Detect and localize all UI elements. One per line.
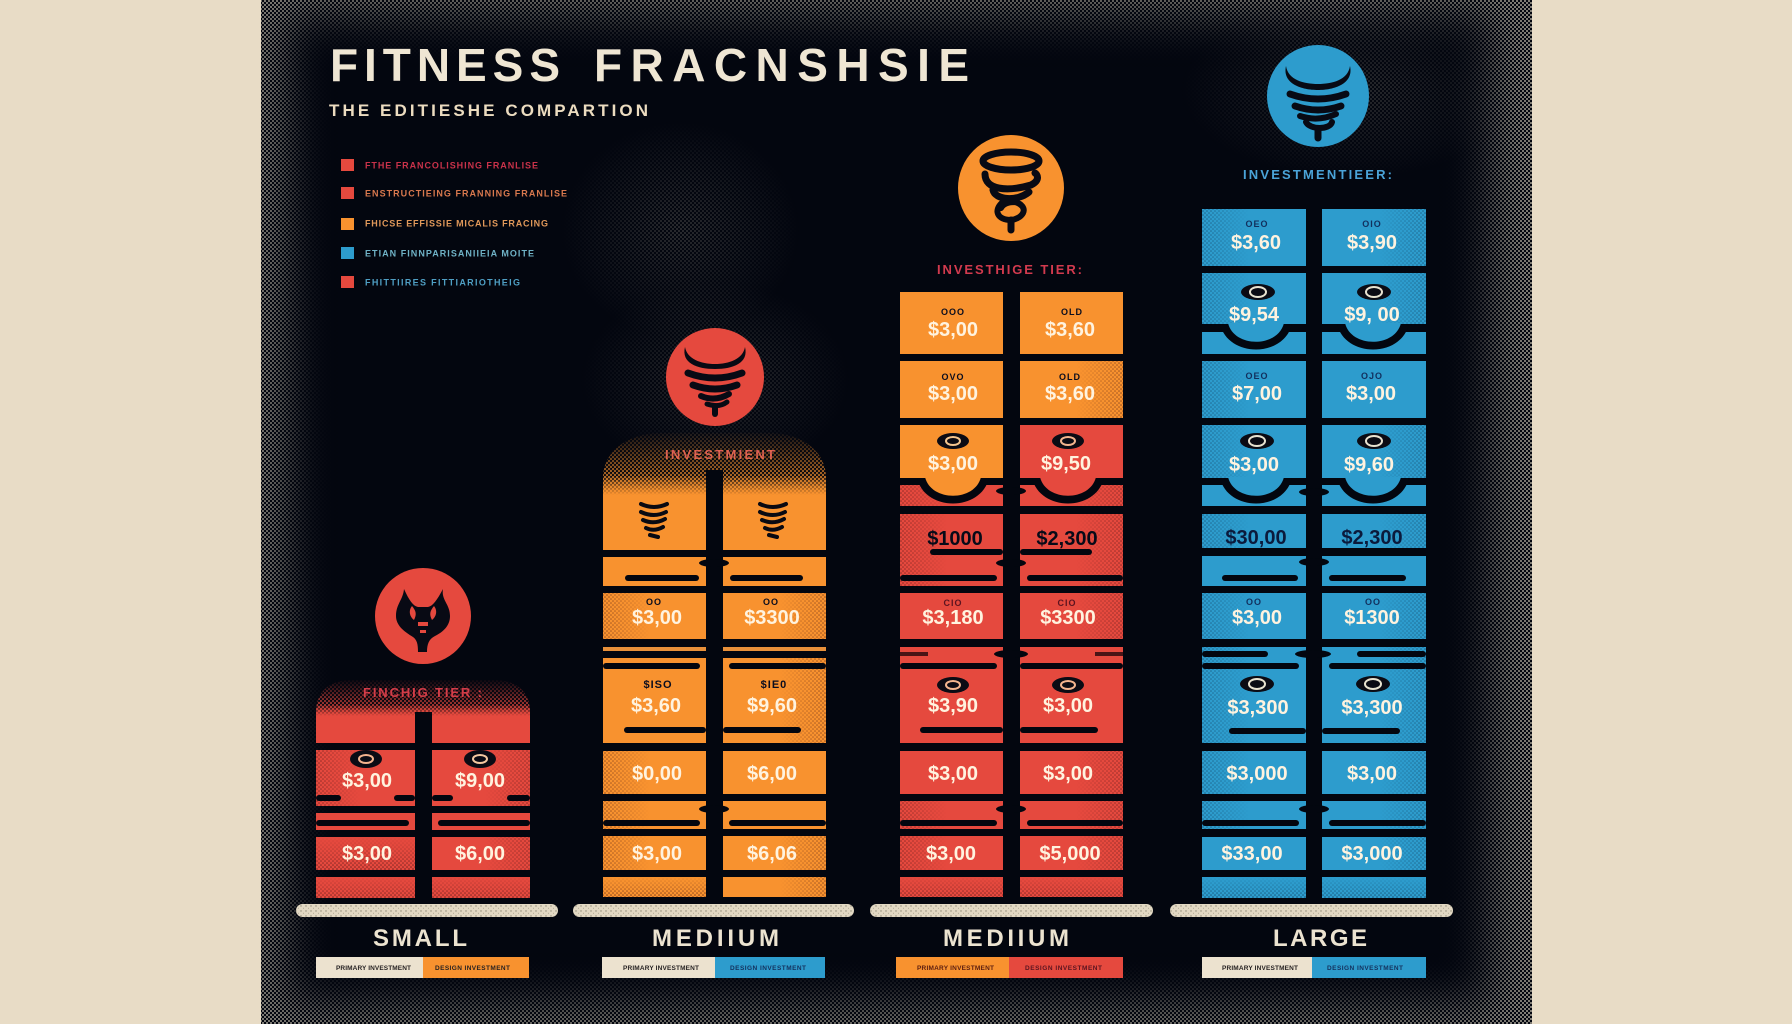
row 5 [900, 593, 1123, 639]
column: medium tier two [870, 135, 1153, 978]
halftone panel edge [261, 0, 1532, 1024]
row 9: $3,00 [926, 843, 976, 865]
row 5: $3,60 [631, 695, 681, 717]
row 11 [1202, 837, 1426, 870]
row 7 [603, 801, 826, 829]
row 8 [603, 836, 826, 870]
row 6 [1202, 556, 1426, 586]
tier key bar: DESIGN INVESTMENT [435, 965, 510, 972]
row 2: $3,00 [928, 383, 978, 405]
tier name: MEDIIUM [652, 925, 779, 952]
center gap [415, 712, 432, 718]
row 4: $2,300 [1036, 528, 1098, 550]
icon: medium tier badge orange [958, 135, 1064, 241]
row 10 [900, 877, 1123, 897]
row 7: $3,00 [1043, 763, 1093, 785]
row 8: $3,300 [1227, 697, 1289, 719]
row 12 [1202, 877, 1426, 898]
row 6: $0,00 [632, 763, 682, 785]
row 1 [603, 495, 826, 550]
row 5: $3,180 [922, 607, 984, 629]
shelf [573, 904, 854, 917]
faint halftone glow behind large badge [1204, 20, 1484, 168]
row 1 [316, 716, 530, 743]
row 4: $6,00 [455, 843, 505, 865]
tier key bar: PRIMARY INVESTMENT [1222, 965, 1298, 972]
tier key bar [316, 957, 529, 978]
row 4: $3,00 [342, 843, 392, 865]
row 5 [1202, 514, 1426, 549]
row 5: CIO [943, 598, 963, 608]
row 3 [603, 593, 826, 639]
row 5: CIO [1057, 598, 1077, 608]
row 6 [900, 647, 1123, 743]
row 3: $3,00 [632, 607, 682, 629]
row 9: $3,00 [1347, 763, 1397, 785]
row 3 [1202, 361, 1426, 418]
row 3 with tabs: $3,00 [928, 453, 978, 475]
row 2: $3,60 [1045, 383, 1095, 405]
tier name: LARGE [1273, 925, 1367, 952]
row 3: OEO [1245, 371, 1269, 381]
row 1: OEO [1245, 219, 1269, 229]
row 7: $1300 [1344, 607, 1400, 629]
row 3: OJO [1361, 371, 1383, 381]
row 8: $3,00 [632, 843, 682, 865]
row 3: $3,00 [1346, 383, 1396, 405]
halftone arch top [603, 433, 826, 495]
row 5: $3300 [1040, 607, 1096, 629]
row 2: $9,00 [455, 770, 505, 792]
row 1: $3,90 [1347, 232, 1397, 254]
row 5: $IE0 [761, 679, 787, 691]
row 5: $30,00 [1225, 527, 1287, 549]
row 4: $1000 [927, 528, 983, 550]
row 7: OO [1365, 597, 1381, 607]
tier key bar: DESIGN INVESTMENT [1327, 965, 1403, 972]
center gap [706, 470, 723, 500]
tier name: SMALL [373, 925, 467, 952]
row 1: OLD [1061, 307, 1083, 317]
row 6: $3,90 [928, 695, 978, 717]
row 4 [603, 647, 826, 651]
column: small tier [296, 568, 558, 978]
title: FITNESS [330, 39, 560, 91]
title: FRACNSHSIE [594, 39, 969, 91]
tier key bar: PRIMARY INVESTMENT [336, 965, 411, 972]
row 4 [900, 514, 1123, 586]
row 3: $7,00 [1232, 383, 1282, 405]
column: large tier [1170, 45, 1453, 978]
row 8: $6,06 [747, 843, 797, 865]
tier name: MEDIIUM [943, 925, 1069, 952]
tier key bar: DESIGN INVESTMENT [1025, 965, 1102, 972]
row 5 [603, 658, 826, 743]
label: investment tier: INVESTMENTIEER: [1243, 167, 1392, 182]
row 7 [1202, 593, 1426, 639]
legend item 4: ETIAN FINNPARISANIIEIA MOITE [365, 248, 534, 258]
row 7: OO [1246, 597, 1262, 607]
label: investment: INVESTMIENT [665, 447, 775, 462]
legend item 5: FHITTIIRES FITTIARIOTHEIG [365, 278, 520, 288]
halftone arch top [316, 680, 530, 716]
row 5: $9,60 [747, 695, 797, 717]
label: investment tier: INVESTHIGE TIER: [937, 262, 1082, 277]
row 2 [900, 361, 1123, 418]
faint halftone glow behind medium column [598, 294, 832, 457]
row 1: $3,00 [928, 319, 978, 341]
row 9 [1202, 751, 1426, 794]
dark poster panel [261, 0, 1532, 1024]
row 4 with tabs [1202, 425, 1426, 506]
row 6: $3,00 [1043, 695, 1093, 717]
row 7: $3,00 [928, 763, 978, 785]
row 3 [316, 813, 530, 830]
row 3: OO [763, 597, 779, 607]
row 2: OVO [941, 372, 965, 382]
subtitle: THE EDITIESHE COMPARTION [329, 101, 648, 120]
row 1: OOO [941, 307, 965, 317]
legend item 3: FHICSE EFFISSIE MICALIS FRACING [365, 218, 548, 228]
row 1 [1202, 209, 1426, 266]
row 7: $3,00 [1232, 607, 1282, 629]
icon: small tier badge [375, 568, 471, 664]
row 9 [900, 836, 1123, 870]
row 11: $3,000 [1341, 843, 1403, 865]
shelf [1170, 904, 1453, 917]
row 4 with tabs: $3,00 [1229, 454, 1279, 476]
row 4 with tabs: $9,60 [1344, 454, 1394, 476]
row 2 [603, 557, 826, 586]
tier key bar: PRIMARY INVESTMENT [917, 965, 994, 972]
row 1 [900, 292, 1123, 354]
row 2 with tabs: $9, 00 [1344, 304, 1400, 326]
row 8 [900, 801, 1123, 829]
legend [341, 159, 567, 288]
tier key bar: DESIGN INVESTMENT [730, 965, 806, 972]
legend item 2: ENSTRUCTIEING FRANNING FRANLISE [365, 188, 567, 198]
row 3: $3300 [744, 607, 800, 629]
shelf [870, 904, 1153, 917]
row 5 [316, 877, 530, 898]
row 1: $3,60 [1045, 319, 1095, 341]
title [330, 39, 969, 91]
tier key bar [602, 957, 825, 978]
row 7 [900, 751, 1123, 794]
faint halftone glow behind legend [576, 135, 784, 324]
row 1: $3,60 [1231, 232, 1281, 254]
icon: large tier badge [1267, 45, 1369, 147]
row 2 with tabs [1202, 273, 1426, 354]
column: medium tier one [573, 328, 854, 978]
row 8 [1202, 647, 1426, 743]
icon: medium tier badge red [666, 328, 764, 426]
row 9: $5,000 [1039, 843, 1101, 865]
row 1: OIO [1362, 219, 1382, 229]
tier key bar: PRIMARY INVESTMENT [623, 965, 699, 972]
row 6 [603, 751, 826, 794]
label: funding tier: FINCHIG TIER : [363, 685, 482, 700]
tier key bar [1202, 957, 1426, 978]
row 3 with tabs: $9,50 [1041, 453, 1091, 475]
row 10 [1202, 801, 1426, 829]
row 2: OLD [1059, 372, 1081, 382]
row 5: $ISO [643, 679, 673, 691]
row 9 [603, 877, 826, 897]
legend item 1: FTHE FRANCOLISHING FRANLISE [365, 160, 538, 170]
row 5: $2,300 [1341, 527, 1403, 549]
row 3 with tabs [900, 425, 1123, 506]
row 4 [316, 837, 530, 870]
row 11: $33,00 [1221, 843, 1283, 865]
row 8: $3,300 [1341, 697, 1403, 719]
row 3: OO [646, 597, 662, 607]
row 2 [316, 750, 530, 806]
row 9: $3,000 [1226, 763, 1288, 785]
row 2: $3,00 [342, 770, 392, 792]
shelf [296, 904, 558, 917]
row 2 with tabs: $9,54 [1229, 304, 1280, 326]
tier key bar [896, 957, 1123, 978]
row 6: $6,00 [747, 763, 797, 785]
